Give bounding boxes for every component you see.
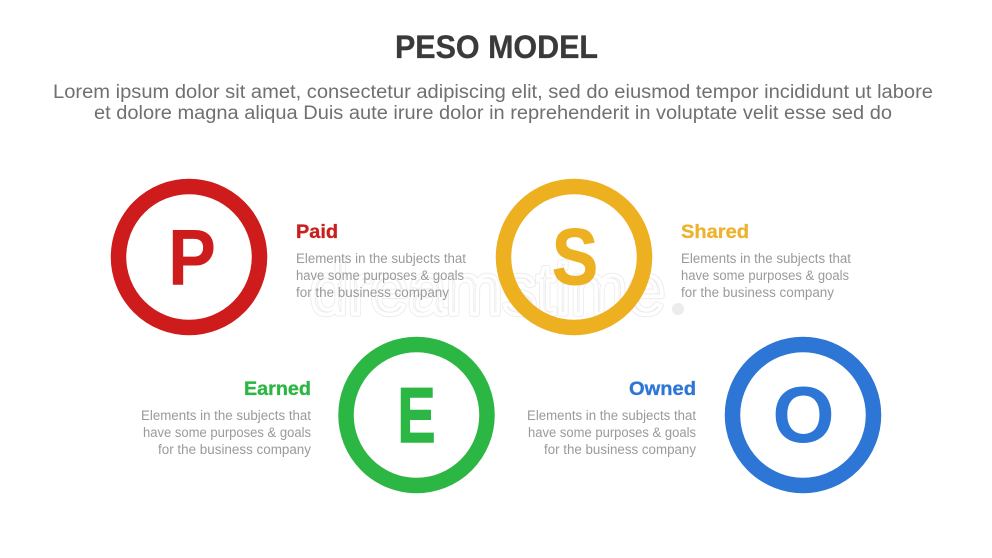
description: shared: have some purposes & goals xyxy=(681,268,849,283)
description: shared xyxy=(681,251,851,300)
subtitle text block: et dolore magna aliqua Duis aute irure dolor in reprehenderit in voluptate velit esse sed do xyxy=(94,103,892,124)
description: shared: Elements in the subjects that xyxy=(681,251,851,266)
description: paid: for the business company xyxy=(296,285,449,300)
panel: earned xyxy=(141,344,487,486)
watermark: dreamstime xyxy=(310,251,665,330)
description: earned xyxy=(141,408,311,457)
heading: shared: Shared xyxy=(681,222,749,243)
icon: S circle: S xyxy=(552,212,598,301)
icon: E circle: E xyxy=(398,371,436,459)
watermark: dreamstime xyxy=(310,251,665,330)
panel: owned xyxy=(527,344,874,486)
subtitle text block: Lorem ipsum dolor sit amet, consectetur adipiscing elit, sed do eiusmod tempor incididunt ut labore xyxy=(53,82,933,103)
description: owned: for the business company xyxy=(544,442,696,457)
title: PESO MODEL xyxy=(395,29,598,65)
description: owned: Elements in the subjects that xyxy=(527,408,696,423)
icon: O circle: O xyxy=(772,370,835,459)
subtitle text block xyxy=(53,82,933,124)
panel: shared xyxy=(504,186,851,328)
description: earned: Elements in the subjects that xyxy=(141,408,311,423)
description: paid: have some purposes & goals xyxy=(296,268,464,283)
description: owned: have some purposes & goals xyxy=(528,425,696,440)
heading: paid: Paid xyxy=(296,222,338,243)
icon: P circle xyxy=(118,186,260,328)
description: earned: have some purposes & goals xyxy=(143,425,311,440)
icon: O circle xyxy=(732,344,874,486)
heading: earned: Earned xyxy=(244,379,311,400)
icon: E circle xyxy=(346,344,487,486)
icon: S circle xyxy=(504,186,644,328)
description: shared: for the business company xyxy=(681,285,834,300)
description: owned xyxy=(527,408,696,457)
description: earned: for the business company xyxy=(158,442,311,457)
icon: P circle: P xyxy=(168,213,216,302)
heading: owned: Owned xyxy=(629,379,696,400)
panel: paid xyxy=(118,186,466,328)
description: paid: Elements in the subjects that xyxy=(296,251,466,266)
description: paid xyxy=(296,251,466,300)
